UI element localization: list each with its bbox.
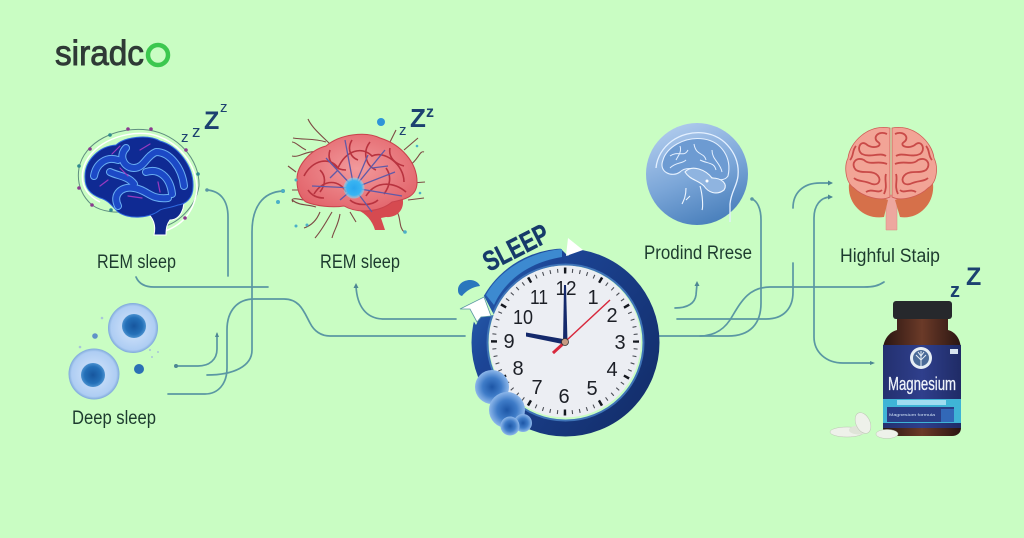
swoosh	[486, 249, 562, 305]
icon: zzz above red brain: z	[399, 122, 406, 139]
clock hands	[526, 285, 610, 353]
label: Deep sleep: Deep sleep	[72, 408, 156, 429]
left hemisphere	[846, 127, 890, 199]
cerebellum and stem	[358, 196, 403, 230]
clock face	[489, 266, 641, 418]
icon: pills	[830, 410, 898, 438]
orbit ring with nodes	[77, 127, 200, 232]
icon: zzz above blue brain: z	[181, 129, 188, 146]
cerebrum	[85, 137, 193, 217]
clock numbers: 11	[530, 287, 548, 309]
right hemisphere	[892, 127, 936, 199]
icon: zzz above red brain: Z	[410, 103, 426, 133]
icon: zzz above blue brain: Z	[204, 107, 219, 135]
icon: zz above jar	[950, 263, 981, 302]
icon: front view brain	[846, 127, 936, 230]
jar label	[883, 345, 961, 428]
central glowing node	[344, 178, 364, 198]
icon: zzz above blue brain: z	[220, 99, 228, 116]
clock numbers: 6	[558, 386, 570, 408]
veins	[312, 140, 402, 212]
label: Prodind Rrese: Prodind Rrese	[644, 243, 752, 264]
bubbles	[475, 370, 532, 436]
drop	[458, 280, 480, 296]
cerebellum and stem	[146, 196, 184, 235]
floating dots	[276, 145, 421, 234]
cell upper	[108, 303, 158, 353]
brain stem	[886, 195, 897, 230]
icon: brain scan circle	[646, 123, 748, 225]
cerebellum	[849, 184, 933, 217]
clock numbers: 3	[614, 332, 626, 354]
icon: zz above jar: z	[950, 280, 960, 302]
clock numbers: 7	[531, 377, 543, 399]
tick marks	[494, 270, 636, 412]
jar cap	[893, 301, 952, 319]
icon: zzz above blue brain	[181, 99, 228, 146]
clock numbers: 9	[503, 331, 515, 353]
clock ring	[480, 256, 652, 428]
icon: blue brain	[77, 127, 200, 235]
icon: zzz above red brain	[399, 103, 434, 139]
clock numbers: 10	[513, 307, 533, 329]
product name: Magnesium	[888, 374, 956, 394]
clock numbers: 12	[556, 278, 576, 300]
clock numbers: 2	[606, 305, 618, 327]
band small text: Magnesium formula	[889, 412, 936, 417]
cyan band	[883, 399, 961, 423]
label: REM sleep left: REM sleep	[97, 252, 176, 273]
branches outside	[288, 119, 425, 238]
clock numbers: 1	[587, 287, 599, 309]
icon: zz above jar: Z	[966, 263, 981, 291]
cerebrum	[297, 134, 417, 211]
clock numbers: 8	[512, 358, 524, 380]
gyri	[94, 144, 184, 206]
connector lines: left side	[136, 188, 465, 394]
sleep word: SLEEP	[478, 218, 554, 277]
cell lower	[68, 348, 120, 400]
icon: zzz above blue brain: z	[192, 122, 200, 141]
jar glass	[883, 319, 961, 436]
magnesium jar	[883, 301, 961, 436]
gyri	[304, 140, 406, 204]
clock numbers: 5	[586, 378, 598, 400]
connector lines: right side	[659, 180, 884, 365]
icon: red brain	[276, 118, 425, 238]
icon: deep sleep cells	[68, 303, 159, 400]
clock numbers: 4	[606, 359, 618, 381]
emblem	[910, 347, 932, 369]
clock numbers	[503, 278, 626, 408]
label: REM sleep center: REM sleep	[320, 252, 400, 273]
icon: zzz above red brain: z	[426, 104, 434, 121]
clock	[458, 218, 652, 436]
label: Highful Staip: Highful Staip	[840, 246, 940, 267]
ring gaps	[560, 232, 582, 256]
logo: siradco: siradc	[55, 34, 144, 73]
